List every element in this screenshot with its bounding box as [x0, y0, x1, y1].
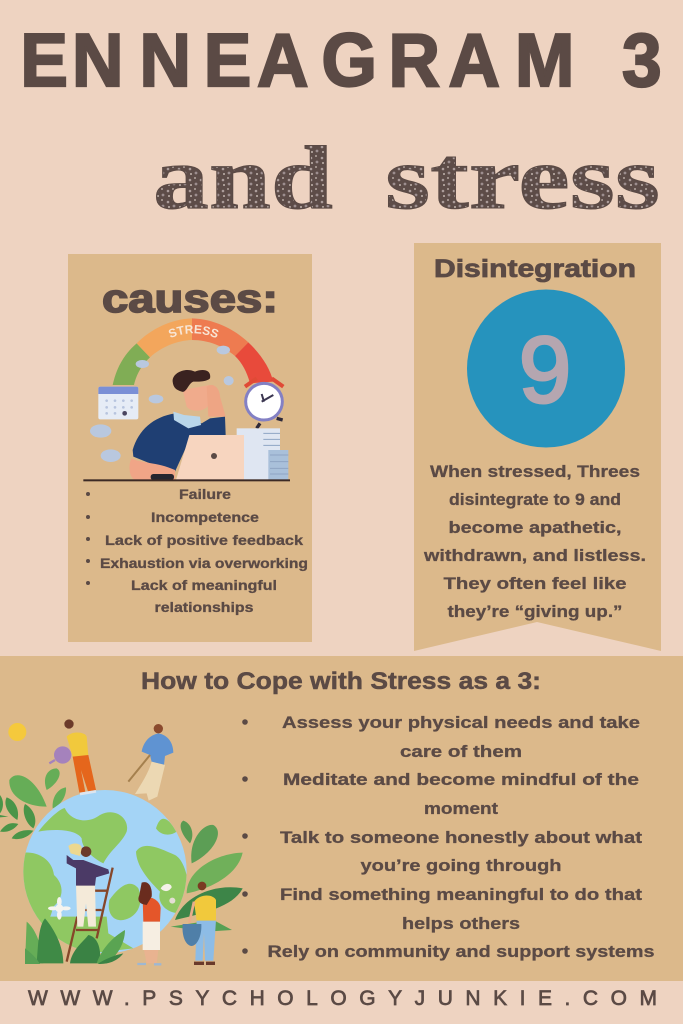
ladder — [67, 868, 113, 962]
disintegration heading: Disintegration — [434, 255, 636, 283]
cope list: Talk to someone honestly about what — [280, 828, 642, 847]
cope heading: How to Cope with Stress as a 3: — [141, 668, 541, 695]
subtitle: and — [153, 129, 333, 228]
disintegration text — [423, 462, 646, 621]
website footer: WWW.PSYCHOLOGYJUNKIE.COM — [28, 987, 657, 1010]
disintegration text: become apathetic, — [448, 518, 622, 537]
cope list: Assess your physical needs and take — [282, 713, 640, 732]
cope list: Meditate and become mindful of the — [283, 770, 639, 789]
stress gauge — [112, 318, 273, 385]
illustration: people caring for the earth — [0, 719, 243, 964]
sun — [8, 723, 26, 741]
subtitle: stress — [385, 129, 660, 228]
globe — [17, 790, 188, 960]
person with watering can — [49, 719, 96, 794]
illustration: stressed man at laptop — [83, 318, 290, 482]
causes list: Lack of meaningful — [131, 578, 277, 593]
causes list: Exhaustion via overworking — [100, 556, 308, 571]
causes list: relationships — [154, 600, 254, 615]
cope list: Find something meaningful to do that — [280, 885, 642, 904]
person in orange — [137, 882, 175, 964]
icon: alarm clock — [245, 378, 283, 428]
cope list: you’re going through — [360, 856, 562, 875]
causes list: Incompetence — [151, 510, 260, 525]
causes list: Lack of positive feedback — [105, 533, 304, 548]
disintegration text: When stressed, Threes — [430, 462, 640, 481]
disintegration text: disintegrate to 9 and — [449, 490, 621, 509]
subtitle — [153, 129, 660, 228]
flower — [48, 897, 71, 920]
causes list — [86, 487, 308, 615]
cope list — [242, 713, 654, 961]
icon: calendar — [98, 387, 138, 419]
foreground plants — [25, 918, 125, 964]
left leaves — [0, 768, 66, 839]
laptop — [176, 435, 244, 480]
title: ENNEAGRAM 3 — [20, 19, 662, 102]
person with bag — [182, 882, 216, 963]
panel: causes — [68, 254, 312, 642]
disintegration text: They often feel like — [444, 574, 626, 593]
person with stick — [128, 724, 173, 801]
disintegration text: withdrawn, and listless. — [423, 546, 646, 565]
person on ladder — [67, 844, 109, 927]
panel: disintegration — [414, 243, 661, 651]
cope list: moment — [424, 799, 498, 818]
cope list: Rely on community and support systems — [268, 942, 654, 961]
disintegration text: they’re “giving up.” — [448, 602, 622, 621]
worry clouds — [90, 346, 234, 462]
cope list: care of them — [400, 742, 522, 761]
causes list: Failure — [179, 487, 232, 502]
causes heading: causes: — [102, 277, 278, 321]
gauge label: STRESS — [168, 325, 218, 338]
paper stack — [237, 428, 288, 480]
number circle — [467, 290, 625, 448]
right leaves — [171, 821, 243, 932]
panel: how to cope — [0, 656, 683, 981]
number circle: 9 — [519, 317, 571, 422]
man — [129, 370, 226, 480]
cope list: helps others — [402, 914, 520, 933]
